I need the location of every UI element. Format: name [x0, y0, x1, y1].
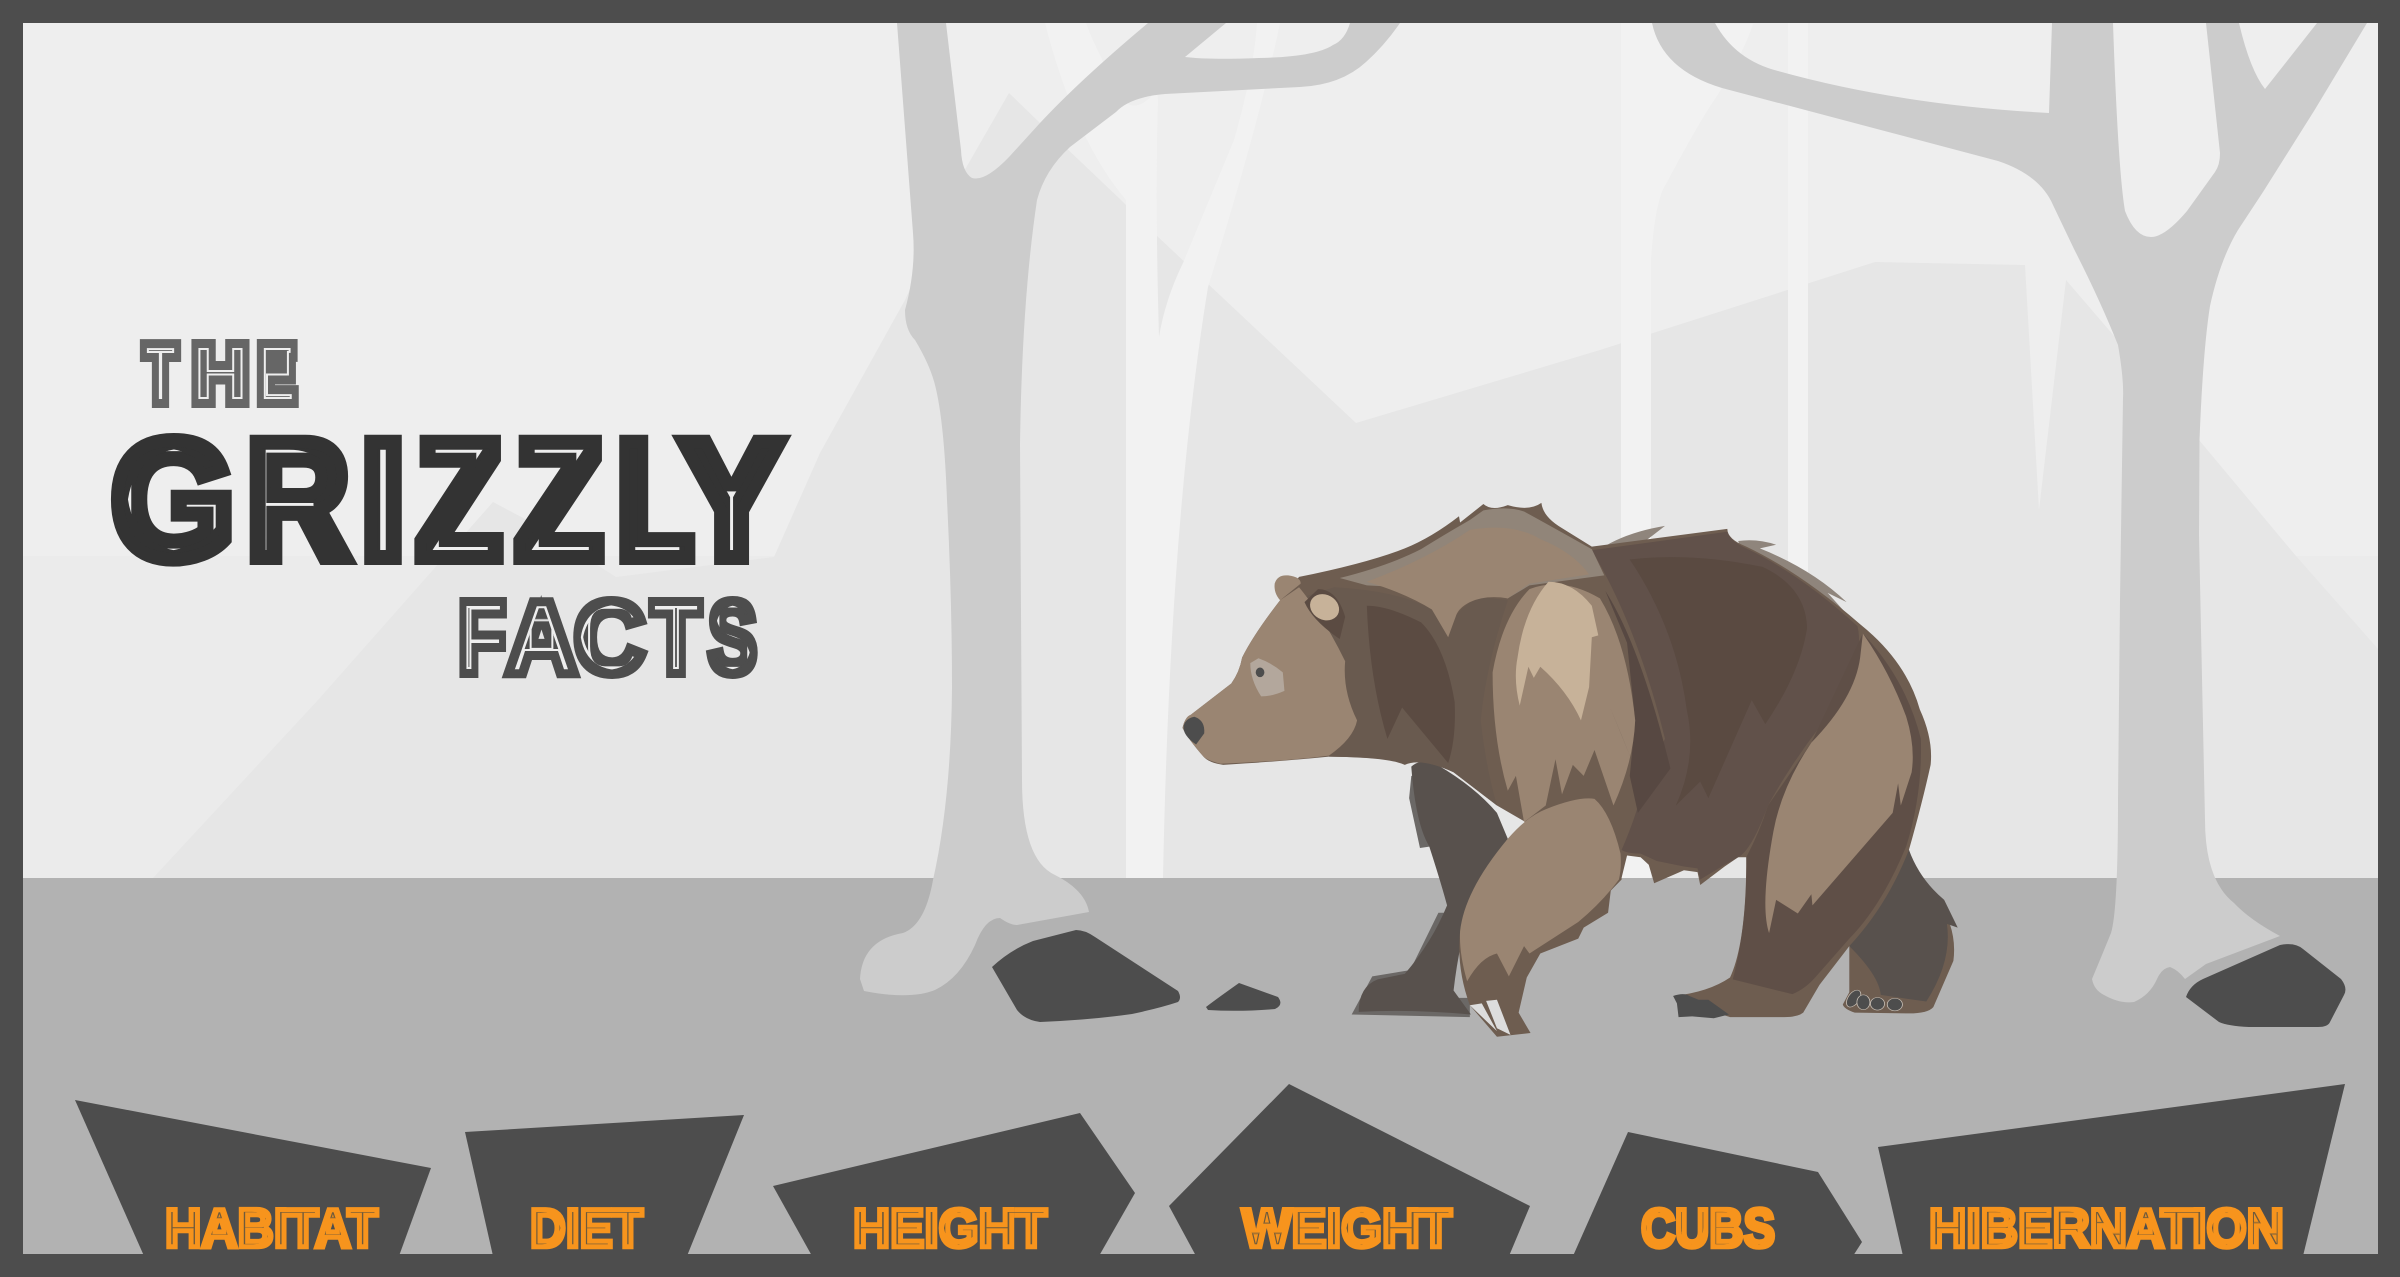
label: weight: WEIGHT [1242, 1197, 1452, 1259]
rock: large right [2186, 944, 2345, 1027]
label: habitat: HABITAT [165, 1197, 378, 1259]
distant pale trees [1045, 23, 1808, 878]
panel: weight [1169, 1084, 1530, 1259]
bear: shaggy grey back fur [1605, 526, 1849, 617]
bear: near hind paw toes [1673, 994, 1729, 1018]
panel: habitat [75, 1100, 431, 1259]
title line: FACTS: S [708, 580, 757, 695]
bear: claws [1470, 1000, 1510, 1035]
bear: shoulder [1493, 582, 1635, 822]
rock: large left [992, 930, 1180, 1022]
panel: diet [465, 1115, 744, 1259]
bear: hump grey highlight [1340, 508, 1604, 598]
title line: FACTS: F [458, 580, 506, 695]
bear: hump tan fur [1367, 528, 1589, 637]
title line: FACTS: A [506, 580, 577, 695]
bear: body silhouette [1183, 503, 1931, 1017]
bear: shoulder pale patch [1516, 582, 1598, 720]
label: height: HEIGHT [853, 1197, 1047, 1259]
title line: GRIZZLY: Z [515, 405, 603, 594]
bear: ear [1275, 575, 1301, 600]
rock: small middle [1206, 983, 1280, 1011]
label: cubs: CUBS [1641, 1197, 1775, 1259]
title line: GRIZZLY: I [360, 405, 406, 594]
bear: nose [1184, 717, 1204, 744]
bear: near hind leg dark fur [1733, 634, 1921, 994]
bear: far front leg [1352, 762, 1508, 1017]
bear: neck shading [1299, 587, 1508, 806]
title line: FACTS: T [651, 580, 701, 695]
title line: GRIZZLY: Z [416, 405, 502, 594]
bear: head [1183, 575, 1357, 764]
bear: inner ear pale [1306, 592, 1343, 623]
title line: THE: E [258, 329, 296, 418]
panel: height [773, 1113, 1135, 1259]
bear: far hind leg [1843, 850, 1958, 1013]
title line: GRIZZLY: L [616, 405, 694, 594]
panel: cubs [1573, 1132, 1862, 1259]
title line: GRIZZLY: R [246, 405, 350, 594]
title line: THE: H [193, 329, 248, 418]
title line: GRIZZLY: Y [680, 405, 783, 594]
title line: THE: T [144, 329, 177, 418]
tree: left [860, 23, 1400, 995]
bear: torso dark fur [1630, 557, 1807, 806]
bear: inner ear dark [1304, 589, 1345, 639]
ground [23, 878, 2379, 1254]
bear: neck dark patch [1367, 606, 1455, 763]
background: misty mountains [153, 93, 2379, 878]
label: diet: DIET [530, 1197, 643, 1259]
bear illustration [1183, 503, 1958, 1037]
bear: dark strip behind shoulder [1605, 591, 1670, 813]
bear: eye patch [1250, 658, 1284, 696]
tree: right [1652, 23, 2367, 1002]
title: The Grizzly Facts [111, 329, 783, 695]
bear: near front leg [1459, 798, 1622, 1037]
panel: hibernation [1878, 1084, 2345, 1259]
bear: shoulder dark slash [1610, 706, 1631, 759]
bear: pupil [1256, 668, 1264, 677]
title line: GRIZZLY: G [111, 405, 235, 594]
bear: near hind leg tan [1765, 634, 1913, 933]
title line: FACTS: C [574, 580, 645, 695]
bear: torso mid-brown [1592, 532, 1859, 879]
bear: far hind paw toes [1844, 989, 1902, 1011]
label: hibernation: HIBERNATION [1929, 1197, 2284, 1259]
